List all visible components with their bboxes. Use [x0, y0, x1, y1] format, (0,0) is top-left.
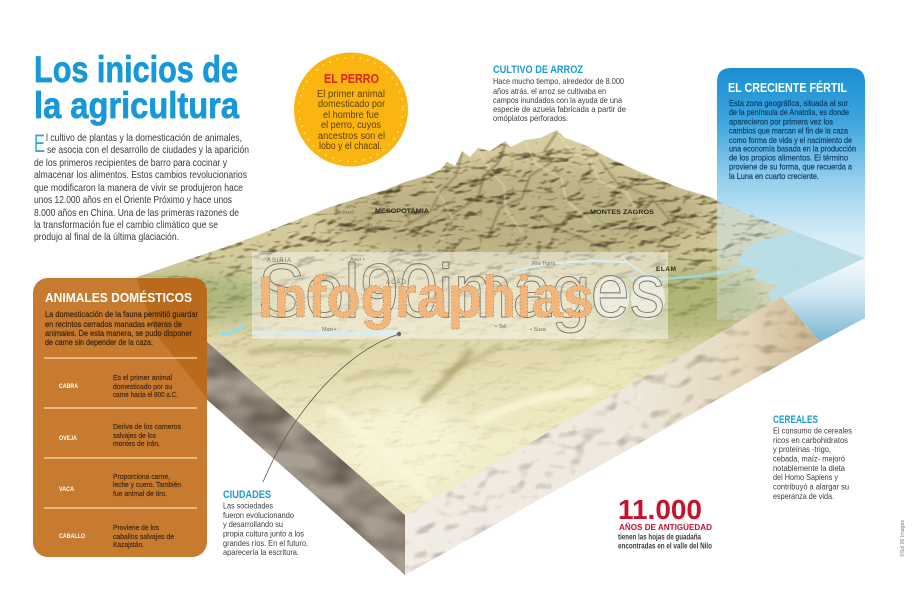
watermark text gray: Sol90images	[258, 249, 665, 334]
row: caballo: Proviene de los	[113, 523, 159, 532]
text block: cultivo de arroz: omóplatos perforados.	[493, 113, 568, 123]
row: oveja: montes de Irán.	[113, 439, 160, 448]
text block: cultivo de arroz: CULTIVO DE ARROZ	[493, 64, 583, 76]
text block: cereales: esperanza de vida.	[773, 491, 834, 501]
yellow circle	[294, 52, 408, 166]
text block: cereales	[773, 414, 852, 501]
row: cabra: CABRA	[59, 383, 78, 390]
foreground streaks	[250, 335, 630, 500]
text block: ciudades	[223, 489, 308, 557]
map labels under watermark: • Susa	[530, 327, 547, 333]
intro text block: la transformación fue el cambio climático que se	[34, 219, 218, 231]
text block: cultivo de arroz	[493, 64, 626, 123]
row: vaca: fue animal de tiro.	[113, 489, 167, 498]
table dividers	[44, 358, 197, 508]
text block: cereales: El consumo de cereales	[773, 426, 852, 436]
text block: el creciente fertil: Esta zona geográfica, situada al sur	[729, 98, 848, 108]
map labels under watermark: ELAM	[656, 266, 676, 273]
text block: cereales: del Homo Sapiens y	[773, 472, 839, 482]
row: vaca: Proporciona carne,	[113, 472, 170, 481]
text block: ciudades: CIUDADES	[223, 489, 271, 501]
label: Mesopotamia: MESOPOTAMIA	[375, 208, 429, 215]
text block: el creciente fertil: una economía basada en la producción	[729, 144, 856, 154]
stat: 11.000 anos de antiguedad	[618, 494, 712, 550]
map labels under watermark: • Tell	[495, 324, 507, 330]
text block: el creciente fertil	[728, 80, 856, 181]
watermark text orange: Infographias	[258, 265, 594, 330]
text block: cereales: notablemente la dieta	[773, 463, 845, 473]
text block: el creciente fertil: EL CRECIENTE FÉRTIL	[728, 80, 847, 95]
intro text block: l cultivo de plantas y la domesticación de animales,	[46, 132, 242, 144]
map labels under watermark: ASIRIA	[267, 258, 291, 264]
text block: cultivo de arroz: especie de azuela fabricada a partir de	[493, 104, 626, 114]
row: caballo: caballos salvajes de	[113, 532, 174, 541]
map labels under watermark: Mari •	[322, 327, 336, 333]
text block: cereales: y proteínas -trigo,	[773, 444, 831, 454]
row: oveja: salvajes de los	[113, 431, 156, 440]
watermark ornament	[595, 276, 665, 320]
text block: ciudades: Las sociedades	[223, 500, 273, 510]
panel intro	[45, 309, 198, 347]
stat: 11.000 anos de antiguedad: tienen las hojas de guadaña	[618, 532, 701, 542]
panel heading: ANIMALES DOMÉSTICOS	[45, 290, 192, 305]
map labels under watermark: Asur •	[350, 257, 365, 263]
dotted ring	[299, 58, 403, 162]
water side face of block	[782, 258, 865, 342]
row: cabra	[59, 373, 178, 399]
intro text block: se asocia con el desarrollo de ciudades y la aparición	[47, 144, 249, 156]
panel: animales domesticos	[33, 278, 207, 557]
text block: cereales: contribuyó a alargar su	[773, 482, 849, 492]
panel intro: en recintos cerrados manadas enteras de	[45, 319, 182, 329]
map labels under watermark: ACAD	[386, 280, 407, 286]
text block: ciudades: fueron evolucionando	[223, 510, 294, 520]
text: ancestros son el	[318, 131, 385, 142]
text block: el creciente fertil: la Luna en cuarto creciente.	[729, 171, 819, 181]
stat: 11.000 anos de antiguedad: encontradas en el valle del Nilo	[618, 540, 712, 550]
text block: el creciente fertil: aparecieron por primera vez los	[729, 116, 834, 126]
label: Montes Zagros: MONTES ZAGROS	[590, 209, 655, 216]
intro text block: almacenar los alimentos. Estos cambios revolucionarios	[34, 169, 247, 181]
panel intro: La domesticación de la fauna permitió guardar	[45, 309, 198, 319]
drop cap: E	[34, 130, 45, 158]
text	[317, 89, 386, 152]
row: caballo: CABALLO	[59, 533, 85, 540]
heading: EL PERRO	[324, 72, 379, 86]
row: vaca: VACA	[59, 486, 74, 493]
intro text block: 8.000 años en China. Una de las primeras razones de	[34, 207, 239, 219]
map labels under watermark: Río Tigris	[532, 261, 555, 267]
plain relief	[130, 330, 830, 520]
text block: cultivo de arroz: años atrás, el arroz se cultivaba en	[493, 86, 606, 96]
intro text block: unos 12.000 años en el Oriente Próximo y hace unos	[34, 194, 232, 206]
row: vaca: leche y cuero. También	[113, 480, 181, 489]
text block: cultivo de arroz: campos inundados con la ayuda de una	[493, 95, 622, 105]
intro text block	[34, 130, 249, 243]
row: cabra: domesticado por su	[113, 382, 172, 391]
stat: 11.000 anos de antiguedad: 11.000	[618, 494, 702, 525]
row: cabra: Es el primer animal	[113, 373, 172, 382]
text: el perro, cuyos	[321, 120, 381, 131]
right side face of block	[405, 297, 821, 576]
terrain block	[130, 125, 870, 576]
text block: ciudades: propia cultura junto a los	[223, 528, 304, 538]
text block: cereales: ricos en carbohidratos	[773, 435, 848, 445]
mountain relief	[138, 132, 780, 510]
watermark backdrop	[252, 252, 668, 339]
row: caballo	[59, 523, 174, 549]
title: la agricultura	[34, 85, 239, 126]
callout line: ciudades	[263, 332, 401, 482]
text block: el creciente fertil: cambios que marcan el fin de la caza	[729, 126, 848, 136]
title: Los inicios de	[34, 49, 238, 90]
text: El primer animal	[317, 89, 385, 100]
map labels	[334, 208, 655, 231]
ground colour patches	[130, 165, 770, 491]
block corner seen through panel	[137, 278, 207, 398]
text block: el creciente fertil: proviene de su forma, que recuerda a	[729, 162, 852, 172]
text: domesticado por	[318, 99, 386, 110]
text block: ciudades: grandes ríos. En el futuro,	[223, 538, 308, 548]
row: oveja: Deriva de los carneros	[113, 422, 181, 431]
row: caballo: Kazajstán.	[113, 540, 144, 549]
text block: cereales: CEREALES	[773, 414, 818, 426]
row: oveja	[59, 422, 181, 448]
text: el hombre fue	[323, 110, 379, 121]
intro text block: que modificaron la manera de vivir se produjeron hace	[34, 182, 243, 194]
title	[34, 49, 239, 126]
panel background	[33, 278, 207, 557]
sea	[735, 230, 870, 302]
row: cabra: carne hacia el 800 a.C.	[113, 390, 178, 399]
text block: ciudades: y desarrollando su	[223, 519, 283, 529]
watermark	[252, 249, 676, 339]
text block: el creciente fertil: como forma de vida y el nacimiento de	[729, 135, 852, 145]
panel intro: de carne sin depender de la caza.	[45, 337, 153, 347]
text block: el creciente fertil: de la península de Anatolia, es donde	[729, 107, 849, 117]
image credit: ©Sol 90 Images	[899, 519, 906, 557]
left side face of block	[207, 342, 405, 575]
text: lobo y el chacal.	[319, 141, 382, 152]
text block: cereales: cebada, maíz- mejoró	[773, 454, 845, 464]
intro text block: de los primeros recipientes de barro para cocinar y	[34, 157, 228, 169]
mountain ridges	[320, 132, 700, 250]
overlay of blue panel on terrain	[717, 200, 864, 320]
callout: el perro	[294, 52, 408, 166]
label: Jebel Sinjar: Jebel	[334, 210, 354, 216]
text block: el creciente fertil: de los propios alimentos. El término	[729, 152, 848, 162]
text block: cultivo de arroz: Hace mucho tiempo, alrededor de 8.000	[493, 76, 624, 86]
map labels under watermark	[267, 257, 676, 333]
intro text block: produjo al final de la última glaciación.	[34, 231, 179, 243]
panel: el creciente fertil background	[717, 68, 865, 320]
text block: ciudades: aparecería la escritura.	[223, 547, 299, 557]
label: Nisibin: • Nisibin	[364, 225, 386, 231]
panel intro: animales. De esta manera, se pudo disponer	[45, 328, 192, 338]
top surface of terrain	[130, 125, 870, 520]
rivers and lakes	[140, 257, 745, 334]
stat: 11.000 anos de antiguedad: AÑOS DE ANTIGÜEDAD	[619, 522, 712, 532]
row: oveja: OVEJA	[59, 435, 77, 442]
row: vaca	[59, 472, 181, 498]
